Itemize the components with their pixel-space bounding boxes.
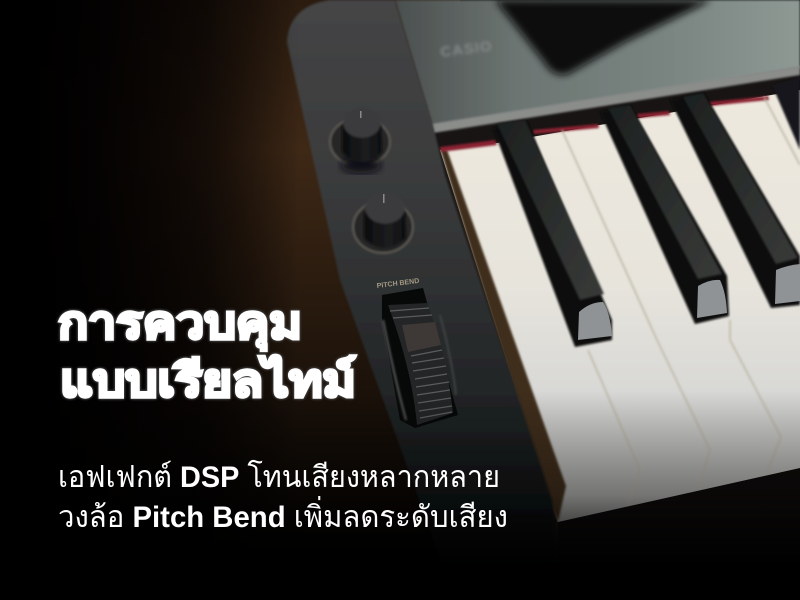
key seams bbox=[562, 97, 800, 505]
light front edge bbox=[431, 66, 800, 133]
key surface bbox=[440, 90, 800, 523]
black key 3 bbox=[670, 93, 800, 308]
dark screen reflection bbox=[495, 0, 712, 75]
brand mark: CASIO bbox=[439, 38, 494, 61]
title: การควบคุม bbox=[58, 297, 302, 351]
title bbox=[58, 297, 356, 406]
knob 1 bbox=[330, 108, 390, 173]
black keys bbox=[493, 78, 800, 347]
description: วงล้อ Pitch Bend เพิ่มลดระดับเสียง bbox=[58, 496, 508, 534]
top panel of the keyboard bbox=[395, 0, 800, 133]
blurred wood background bbox=[0, 0, 460, 600]
side control panel bbox=[287, 0, 560, 600]
description bbox=[58, 459, 508, 534]
pitch bend label: PITCH BEND bbox=[376, 278, 420, 290]
wooden key side bbox=[440, 148, 566, 522]
left dark fade bbox=[0, 0, 300, 600]
red felt strips bbox=[440, 96, 769, 152]
keyboard bed behind the keys bbox=[430, 65, 800, 600]
black key 4 bbox=[772, 78, 800, 150]
white keys bbox=[440, 90, 800, 600]
bottom rail bbox=[558, 468, 800, 600]
black key 2 bbox=[600, 105, 729, 324]
bottom black band bbox=[0, 565, 800, 600]
bottom dark fade bbox=[0, 390, 800, 566]
knob 2 bbox=[353, 192, 413, 253]
title: แบบเรียลไทม์ bbox=[60, 354, 356, 406]
description: เอฟเฟกต์ DSP โทนเสียงหลากหลาย bbox=[58, 459, 500, 494]
black key 1 bbox=[493, 120, 612, 347]
wood vertical shading bbox=[0, 0, 460, 600]
pitch bend wheel bbox=[382, 288, 458, 428]
